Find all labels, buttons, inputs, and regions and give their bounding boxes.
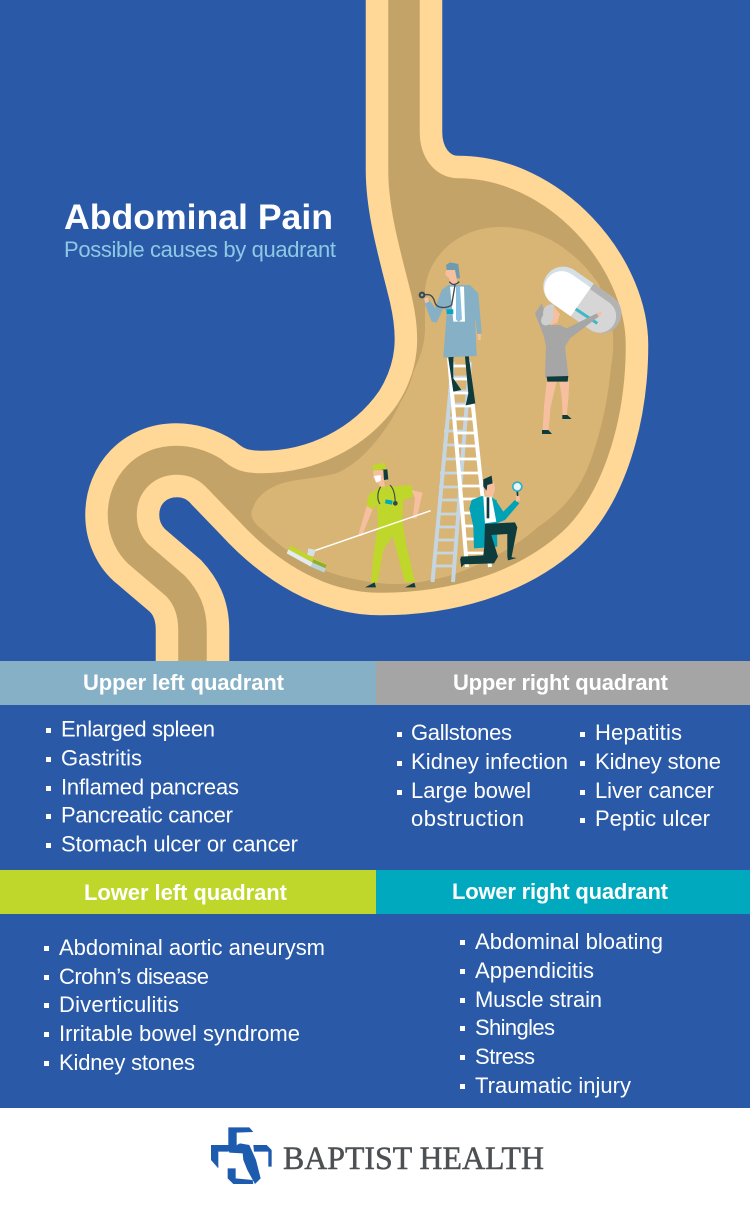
list: upper left causes: Gastritis [61,746,142,770]
list: upper right causes, column one: Large bowel [411,778,531,803]
title: Abdominal Pain [64,198,333,237]
icon: front ladder [449,358,490,567]
list: upper right causes, column one [397,720,568,831]
list: lower right causes: Traumatic injury [475,1073,631,1098]
panel: upper left quadrant [0,661,376,856]
wordmark: BAPTIST HEALTH [283,1141,544,1177]
list: lower right causes [460,929,663,1098]
icon: surgeon with mop [287,463,431,587]
icon: back ladder [432,362,470,582]
heading: lower left quadrant: Lower left quadrant [84,880,288,905]
icon: doctor with stethoscope [419,262,482,405]
list: upper right causes, column two [580,720,721,831]
list: lower left causes: Crohn’s disease [59,964,209,989]
list: upper left causes: Pancreatic cancer [61,802,233,828]
list: upper right causes, column two: Kidney stone [595,749,721,774]
list: upper right causes, column two: Peptic ulcer [595,806,710,831]
panel: lower left quadrant [0,870,376,1075]
list: lower left causes: Diverticulitis [59,992,179,1017]
list: upper left causes: Enlarged spleen [61,716,215,742]
list: upper right causes, column one: Kidney infection [411,749,568,774]
list: lower right causes: Shingles [475,1015,555,1040]
list: upper right causes, column one: obstruction [411,806,524,831]
heading: upper left quadrant [0,661,376,705]
heading: upper right quadrant: Upper right quadrant [453,670,669,695]
list: lower right causes: Stress [475,1044,535,1069]
stomach inner lighter area [251,227,613,584]
list: lower left causes [44,935,325,1075]
heading: lower left quadrant [0,870,376,914]
heading: upper left quadrant: Upper left quadrant [83,670,285,695]
illustration: stomach [96,0,637,690]
heading: upper right quadrant [376,661,750,705]
panel: upper right quadrant [376,661,750,831]
list: lower right causes: Appendicitis [475,958,594,983]
list: upper right causes, column two: Liver cancer [595,778,714,803]
list: upper left causes: Stomach ulcer or cancer [61,832,298,856]
logo: Baptist Health [211,1127,544,1184]
list: upper right causes, column two: Hepatitis [595,720,682,745]
list: upper left causes: Inflamed pancreas [61,774,239,800]
heading: lower right quadrant: Lower right quadrant [452,879,669,904]
list: upper left causes [46,716,298,856]
list: lower left causes: Kidney stones [59,1050,195,1075]
heading: lower right quadrant [376,870,750,914]
list: lower left causes: Abdominal aortic aneurysm [59,935,325,960]
icon: kneeling doctor with magnifier [460,476,522,567]
list: lower left causes: Irritable bowel syndrome [59,1021,300,1046]
list: lower right causes: Muscle strain [475,987,602,1012]
subtitle: Possible causes by quadrant [64,237,336,262]
panel: lower right quadrant [376,870,750,1098]
list: upper right causes, column one: Gallstones [411,720,512,745]
list: lower right causes: Abdominal bloating [475,929,663,954]
icon: cross with Florida [211,1127,272,1184]
icon: woman lifting pill [535,259,629,434]
